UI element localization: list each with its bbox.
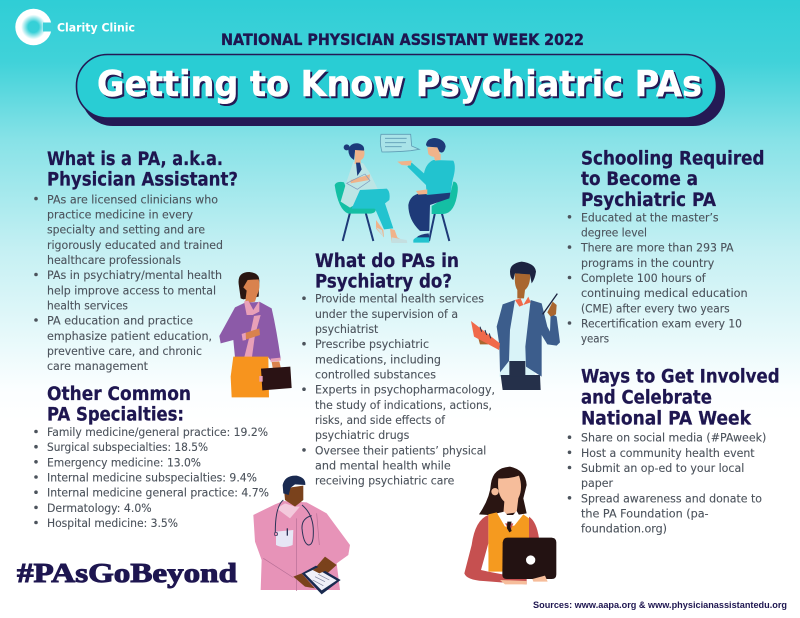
panel: what is a PA: healthcare professionals <box>47 253 181 267</box>
panel: other common PA specialties: Family medicine/general practice: 19.2% <box>47 425 268 439</box>
panel: schooling required: programs in the country <box>581 256 715 270</box>
panel: what is a PA: practice medicine in every <box>47 208 193 222</box>
panel: what do PAs in psychiatry do: under the supervision of a <box>315 307 458 321</box>
panel: schooling required: Recertification exam every 10 <box>581 316 742 330</box>
panel: other common PA specialties: Emergency medicine: 13.0% <box>47 455 201 469</box>
panel: other common PA specialties: Internal medicine general practice: 4.7% <box>47 486 269 500</box>
panel: other common PA specialties: PA Specialties: <box>47 405 184 426</box>
panel: ways to get involved: Spread awareness and donate to <box>581 491 762 505</box>
panel: what is a PA: health services <box>47 298 128 312</box>
panel: what is a PA: help improve access to mental <box>47 283 216 297</box>
panel: other common PA specialties: Hospital medicine: 3.5% <box>47 516 178 530</box>
panel: what is a PA: rigorously educated and trained <box>47 238 223 252</box>
panel: ways to get involved: and Celebrate <box>581 387 712 408</box>
panel: what do PAs in psychiatry do: psychiatric drugs <box>315 428 409 442</box>
title banner: Getting to Know Psychiatric PAs <box>97 64 702 105</box>
panel: ways to get involved: foundation.org) <box>581 522 667 536</box>
panel: what do PAs in psychiatry do: Provide mental health services <box>315 292 484 306</box>
panel: other common PA specialties: Dermatology: 4.0% <box>47 501 152 515</box>
panel: what do PAs in psychiatry do: risks, and side effects of <box>315 413 446 427</box>
panel: schooling required: Educated at the master’s <box>581 210 719 224</box>
panel: schooling required: Schooling Required <box>581 148 764 169</box>
panel: other common PA specialties <box>34 384 269 530</box>
title banner <box>76 54 725 126</box>
panel: ways to get involved: National PA Week <box>581 408 752 429</box>
panel: schooling required: Complete 100 hours of <box>581 271 707 285</box>
panel: schooling required: There are more than 293 PA <box>580 241 734 255</box>
panel: what is a PA: What is a PA, a.k.a. <box>47 149 223 170</box>
panel: ways to get involved: Ways to Get Involved <box>581 366 780 387</box>
panel: schooling required <box>568 148 764 346</box>
panel: what do PAs in psychiatry do: Experts in psychopharmacology, <box>315 383 495 397</box>
hashtag: #PAsGoBeyond <box>17 558 237 588</box>
panel: ways to get involved: the PA Foundation (pa- <box>581 506 709 520</box>
event heading: NATIONAL PHYSICIAN ASSISTANT WEEK 2022 <box>221 30 584 49</box>
panel: schooling required: to Become a <box>581 169 698 190</box>
illustration: man in blue blazer with book <box>471 262 560 390</box>
panel: other common PA specialties: Surgical subspecialties: 18.5% <box>47 440 208 454</box>
panel: other common PA specialties: Internal medicine subspecialties: 9.4% <box>47 470 257 484</box>
logo: Clarity Clinic <box>15 9 135 45</box>
logo: Clarity Clinic: Clarity Clinic <box>57 20 135 34</box>
illustration: clinician and patient conversation <box>335 134 458 243</box>
panel: what do PAs in psychiatry do: Prescribe psychiatric <box>315 337 429 351</box>
panel: schooling required: continuing medical education <box>581 286 748 300</box>
panel: what do PAs in psychiatry do: controlled substances <box>315 368 436 382</box>
panel: ways to get involved: Host a community health event <box>581 446 755 460</box>
illustration: woman with laptop <box>464 467 556 584</box>
panel: what is a PA: PAs in psychiatry/mental health <box>47 268 222 282</box>
panel: ways to get involved <box>568 366 780 536</box>
panel: schooling required: years <box>581 332 609 346</box>
panel: other common PA specialties: Other Common <box>47 384 191 405</box>
panel: what do PAs in psychiatry do: medications, including <box>315 352 441 366</box>
panel: what is a PA: Physician Assistant? <box>47 170 238 190</box>
panel: what do PAs in psychiatry do: the study of indications, actions, <box>315 398 492 412</box>
illustration: doctor in pink coat with clipboard <box>253 476 350 594</box>
title banner: Getting to Know Psychiatric PAs <box>99 66 704 107</box>
panel: what do PAs in psychiatry do: Psychiatry do? <box>315 272 452 293</box>
panel: what is a PA: emphasize patient education, <box>47 329 212 343</box>
panel: ways to get involved: paper <box>581 476 613 490</box>
panel: schooling required: (CME) after every two years <box>581 301 730 315</box>
panel: what do PAs in psychiatry do: What do PAs in <box>315 251 459 272</box>
panel: what is a PA: preventive care, and chronic <box>47 344 202 358</box>
panel: what is a PA: PAs are licensed clinicians who <box>47 192 218 206</box>
panel: schooling required: degree level <box>581 226 647 240</box>
panel: schooling required: Psychiatric PA <box>581 190 717 211</box>
panel: what do PAs in psychiatry do: psychiatrist <box>315 322 379 336</box>
sources: Sources: www.aapa.org & www.physicianassistantedu.org <box>533 600 787 611</box>
panel: what do PAs in psychiatry do: receiving psychiatric care <box>315 474 454 488</box>
panel: ways to get involved: Submit an op-ed to your local <box>581 461 744 475</box>
illustration: woman in purple holding folder <box>219 272 292 397</box>
panel: what is a PA: PA education and practice <box>47 314 193 328</box>
panel: what do PAs in psychiatry do: and mental health while <box>315 458 451 472</box>
panel: what is a PA: care management <box>47 359 149 373</box>
panel: what do PAs in psychiatry do <box>302 251 495 488</box>
panel: ways to get involved: Share on social media (#PAweek) <box>581 431 766 445</box>
panel: what do PAs in psychiatry do: Oversee their patients’ physical <box>315 443 486 457</box>
panel: what is a PA <box>34 149 238 373</box>
panel: what is a PA: specialty and setting and are <box>47 223 205 237</box>
